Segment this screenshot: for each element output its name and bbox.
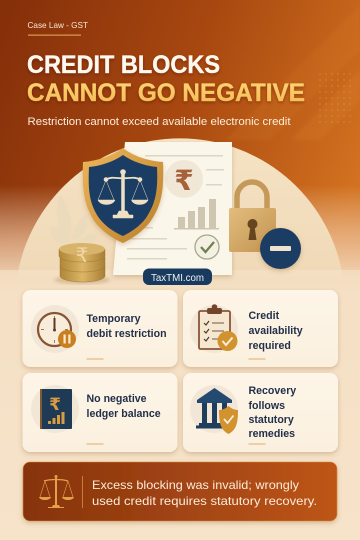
bar chart: [174, 199, 219, 230]
card: credit availability required: [183, 290, 338, 367]
eyebrow label: [28, 21, 88, 36]
icon: padlock with minus: [229, 182, 301, 269]
icon: clipboard with check: [199, 304, 238, 351]
document: ₹: [174, 165, 194, 196]
card: temporary debit restriction: [22, 290, 178, 367]
icon: banner scales: [39, 475, 74, 508]
card: recovery follows statutory remedies: statutory: [248, 414, 294, 426]
brand pill: TaxTMI.com: [151, 273, 204, 284]
document: [113, 142, 232, 275]
icon: rupee badge: [165, 160, 203, 198]
icon: bank with shield: [196, 388, 238, 434]
brand pill: [143, 268, 212, 285]
icon: ledger book: ₹: [49, 395, 61, 414]
icon: shield with scales: [83, 148, 163, 243]
card: no negative ledger balance: No negative: [86, 393, 147, 405]
conclusion banner: [23, 462, 337, 521]
document text lines: [122, 155, 224, 260]
title: CREDIT BLOCKS: [27, 51, 220, 79]
card: no negative ledger balance: [22, 373, 178, 452]
card: temporary debit restriction: debit restriction: [86, 328, 167, 340]
icon: leaves: [50, 195, 98, 245]
icon: ledger book: [40, 389, 72, 429]
icon: coin stack: [54, 243, 110, 284]
card: credit availability required: availability: [248, 325, 303, 337]
card: recovery follows statutory remedies: remedies: [248, 428, 295, 440]
conclusion banner: Excess blocking was invalid; wrongly: [92, 478, 299, 492]
conclusion banner: used credit requires statutory recovery.: [92, 494, 317, 508]
card: recovery follows statutory remedies: Recovery: [248, 385, 296, 397]
card: credit availability required: required: [248, 340, 291, 352]
card: recovery follows statutory remedies: follows: [248, 400, 285, 412]
card: recovery follows statutory remedies: [183, 373, 338, 452]
eyebrow label: Case Law - GST: [28, 21, 88, 30]
card: temporary debit restriction: Temporary: [86, 313, 141, 325]
icon: check circle: [195, 235, 219, 259]
hero dome: [18, 138, 342, 285]
subtitle: Restriction cannot exceed available electronic credit: [28, 116, 291, 128]
icon: coin stack: ₹: [76, 245, 88, 267]
card: no negative ledger balance: ledger balance: [86, 408, 161, 420]
card: credit availability required: Credit: [248, 310, 280, 322]
icon: clock with pause: [38, 313, 76, 348]
title: CANNOT GO NEGATIVE: [27, 79, 305, 107]
title: [27, 51, 305, 107]
minus badge: [260, 228, 301, 269]
